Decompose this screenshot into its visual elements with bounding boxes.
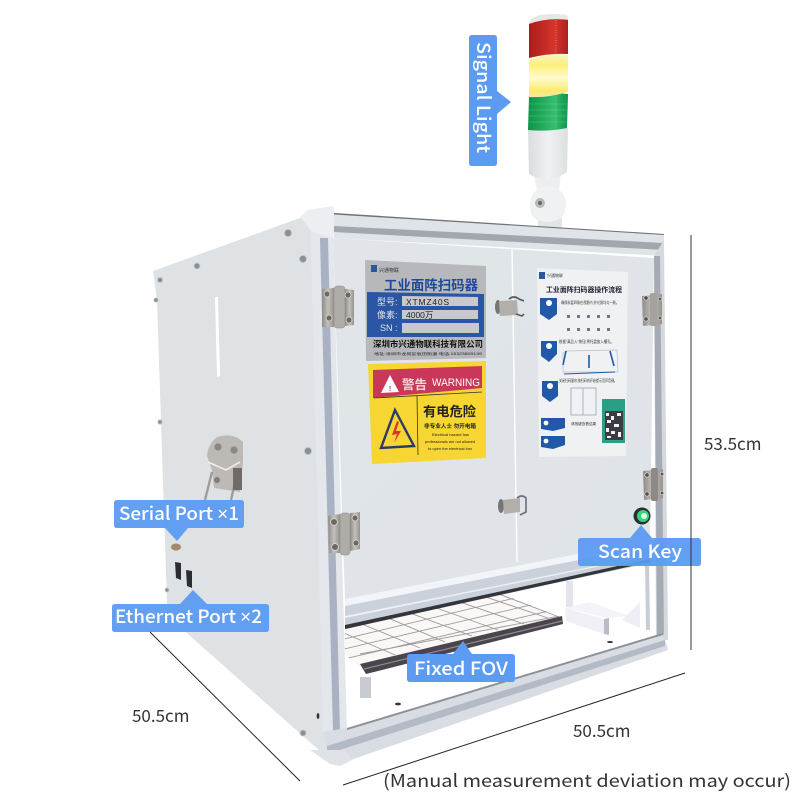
warning label: to open the electrical box xyxy=(428,447,472,451)
operation flow card: 请按键查看结果 xyxy=(571,421,597,426)
operation flow card xyxy=(537,268,628,457)
label: Signal Light: Signal Light xyxy=(471,42,497,154)
side panel screws xyxy=(154,229,312,736)
green lamp xyxy=(528,93,568,131)
inner opening xyxy=(345,560,652,728)
frame corner foot xyxy=(310,750,352,766)
warning label: ! xyxy=(389,386,391,393)
warning label: 非专业人士 勿开电箱 xyxy=(424,422,476,430)
label: Signal Light xyxy=(469,35,511,166)
nameplate: 像素: xyxy=(377,309,398,320)
red lamp xyxy=(529,18,568,58)
scan key xyxy=(634,508,650,524)
hinge: upper left xyxy=(322,286,354,328)
tower swivel mount xyxy=(530,172,566,228)
serial port xyxy=(171,544,181,550)
dimension line: width xyxy=(343,673,685,785)
label: Scan Key: Scan Key xyxy=(598,538,682,564)
tower white body xyxy=(528,128,568,179)
dimension: depth 50.5cm: 50.5cm xyxy=(132,702,189,727)
operation flow card: 根据"真品入"按钮,将托盘放入槽孔。 xyxy=(559,338,614,344)
warning label: professionals are not allowed xyxy=(425,440,475,444)
hinge: upper right xyxy=(642,293,662,326)
door lower lip xyxy=(345,541,651,627)
warning label: Electrical hazard has xyxy=(432,433,469,437)
nameplate xyxy=(365,260,486,361)
nameplate: 型号: xyxy=(377,297,398,307)
hinge: lower left xyxy=(328,512,360,555)
bottom frame rail xyxy=(323,633,668,762)
warning label: 有电危险 xyxy=(423,404,476,419)
grid front bar xyxy=(360,616,563,674)
operation flow card: 工业面阵扫码器操作流程 xyxy=(546,285,622,294)
signal light tower xyxy=(528,14,569,228)
dot diagram xyxy=(567,315,610,331)
side panel ventilation slot xyxy=(215,297,220,377)
nameplate: 4000万 xyxy=(406,310,433,320)
yellow lamp xyxy=(529,54,568,97)
dimension: 53.5cm: 53.5cm xyxy=(704,430,761,455)
warning label: WARNING xyxy=(432,377,480,389)
hinge: lower right xyxy=(643,468,664,501)
QR code xyxy=(602,399,625,443)
label: Ethernet Port: Ethernet Port ×2 xyxy=(115,603,262,629)
latch: upper xyxy=(495,297,524,316)
left frame post xyxy=(310,212,347,732)
nameplate: XTMZ40S xyxy=(406,297,450,307)
label: Fixed FOV: Fixed FOV xyxy=(414,655,509,681)
latch: lower xyxy=(498,496,526,515)
ethernet ports xyxy=(175,562,192,588)
measurement note: (Manual measurement deviation may occur) xyxy=(383,768,791,793)
dimension line: depth xyxy=(150,632,300,781)
inspection grid xyxy=(345,594,563,674)
warning label xyxy=(368,361,486,464)
operation flow card: 兴通物联 xyxy=(547,272,563,278)
step badges xyxy=(540,298,565,449)
top frame rail xyxy=(334,213,664,256)
label: Serial Port xyxy=(114,500,244,541)
window diagram xyxy=(571,388,596,415)
label: Ethernet Port xyxy=(112,590,269,632)
tray diagram xyxy=(563,350,618,374)
warning label: 警告 xyxy=(402,377,427,392)
nameplate: SN : xyxy=(380,323,398,333)
label: Fixed FOV xyxy=(407,641,515,682)
door panel xyxy=(333,238,654,600)
operation flow card: 关闭扫码窗帘,按扫码的开始提示音声音键。 xyxy=(559,377,617,383)
door seam xyxy=(512,249,517,562)
nameplate: 地址:深圳市龙岗区坂田街道 电话:15323809149 xyxy=(374,351,482,356)
corner piece xyxy=(300,206,336,238)
right frame post xyxy=(654,240,668,640)
left side panel xyxy=(153,214,335,760)
tower cap xyxy=(529,14,569,24)
dimension: width 50.5cm: 50.5cm xyxy=(573,717,630,742)
cabinet xyxy=(153,206,668,766)
operation flow card: 确保料盘四角在视野内,并光照均匀一致。 xyxy=(561,299,619,305)
label: Serial Port: Serial Port ×1 xyxy=(119,500,239,526)
side latch xyxy=(205,435,243,500)
fixture blocks xyxy=(360,562,650,705)
dimension line: height xyxy=(690,235,692,650)
nameplate: 深圳市兴通物联科技有限公司 xyxy=(373,338,483,349)
label: Scan Key xyxy=(578,525,701,566)
nameplate: 工业面阵扫码器 xyxy=(384,277,479,293)
nameplate: 兴通物联 xyxy=(379,267,399,274)
